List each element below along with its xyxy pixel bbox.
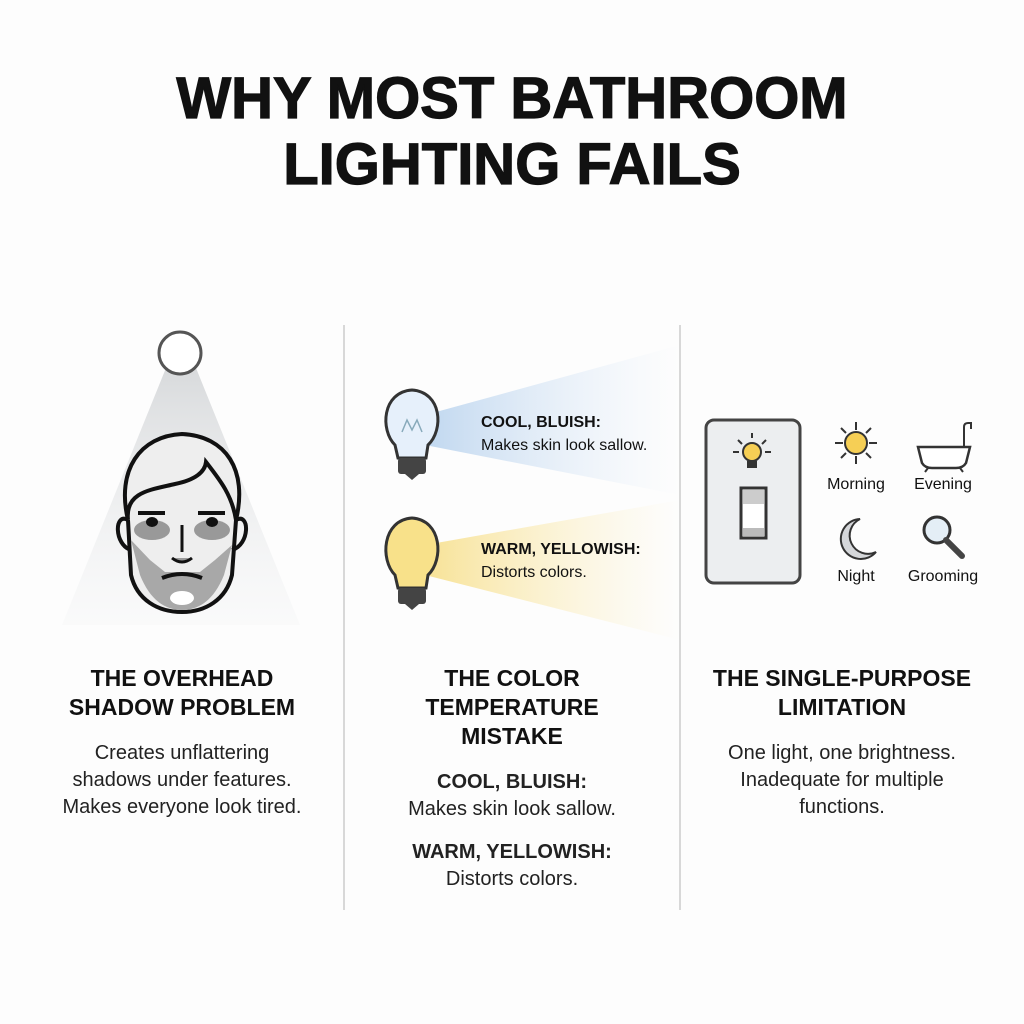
heading 3: LIMITATION xyxy=(778,694,906,720)
labels: cool xyxy=(481,414,647,454)
icon: magnifier xyxy=(924,517,962,556)
icon: sun xyxy=(835,422,877,464)
icon: warm bulb xyxy=(386,518,438,610)
text 2: Distorts colors. xyxy=(446,868,578,890)
text 3 xyxy=(728,742,956,818)
title xyxy=(176,66,848,197)
heading 1: THE OVERHEAD xyxy=(91,665,273,691)
text 1: Makes everyone look tired. xyxy=(62,796,302,818)
heading 2: TEMPERATURE xyxy=(425,694,599,720)
labels: warm: Distorts colors. xyxy=(481,564,587,581)
text 1 xyxy=(62,742,302,818)
heading 1 xyxy=(69,665,295,720)
text 3: One light, one brightness. xyxy=(728,742,956,764)
icon: light switch xyxy=(706,420,800,583)
text 2: Makes skin look sallow. WARM, YELLOWISH: xyxy=(408,798,616,863)
heading 3 xyxy=(713,665,971,720)
text 1: Creates unflattering xyxy=(95,742,269,764)
icon: bathtub xyxy=(918,423,971,472)
text 2: COOL, BLUISH: xyxy=(437,771,587,793)
heading 2 xyxy=(425,665,599,749)
icon: moon xyxy=(841,519,876,559)
heading 2: THE COLOR xyxy=(444,665,580,691)
labels: cool: COOL, BLUISH: xyxy=(481,414,601,431)
text: Night xyxy=(837,568,875,585)
heading 2: MISTAKE xyxy=(461,723,563,749)
text 2 xyxy=(408,771,616,890)
text 1: shadows under features. xyxy=(72,769,292,791)
beams xyxy=(425,345,680,495)
labels: warm: WARM, YELLOWISH: xyxy=(481,541,641,558)
title: WHY MOST BATHROOM xyxy=(176,66,848,131)
labels: cool: Makes skin look sallow. xyxy=(481,437,647,454)
title: LIGHTING FAILS xyxy=(283,132,741,197)
text 3: functions. xyxy=(799,796,885,818)
icon labels: Morning xyxy=(827,476,885,493)
icon: cool bulb xyxy=(386,390,438,480)
labels: warm xyxy=(481,541,641,581)
text: Evening xyxy=(914,476,972,493)
heading 1: SHADOW PROBLEM xyxy=(69,694,295,720)
text 3: Inadequate for multiple xyxy=(740,769,944,791)
icon: overhead light and face xyxy=(62,332,300,625)
text: Grooming xyxy=(908,568,978,585)
heading 3: THE SINGLE-PURPOSE xyxy=(713,665,971,691)
